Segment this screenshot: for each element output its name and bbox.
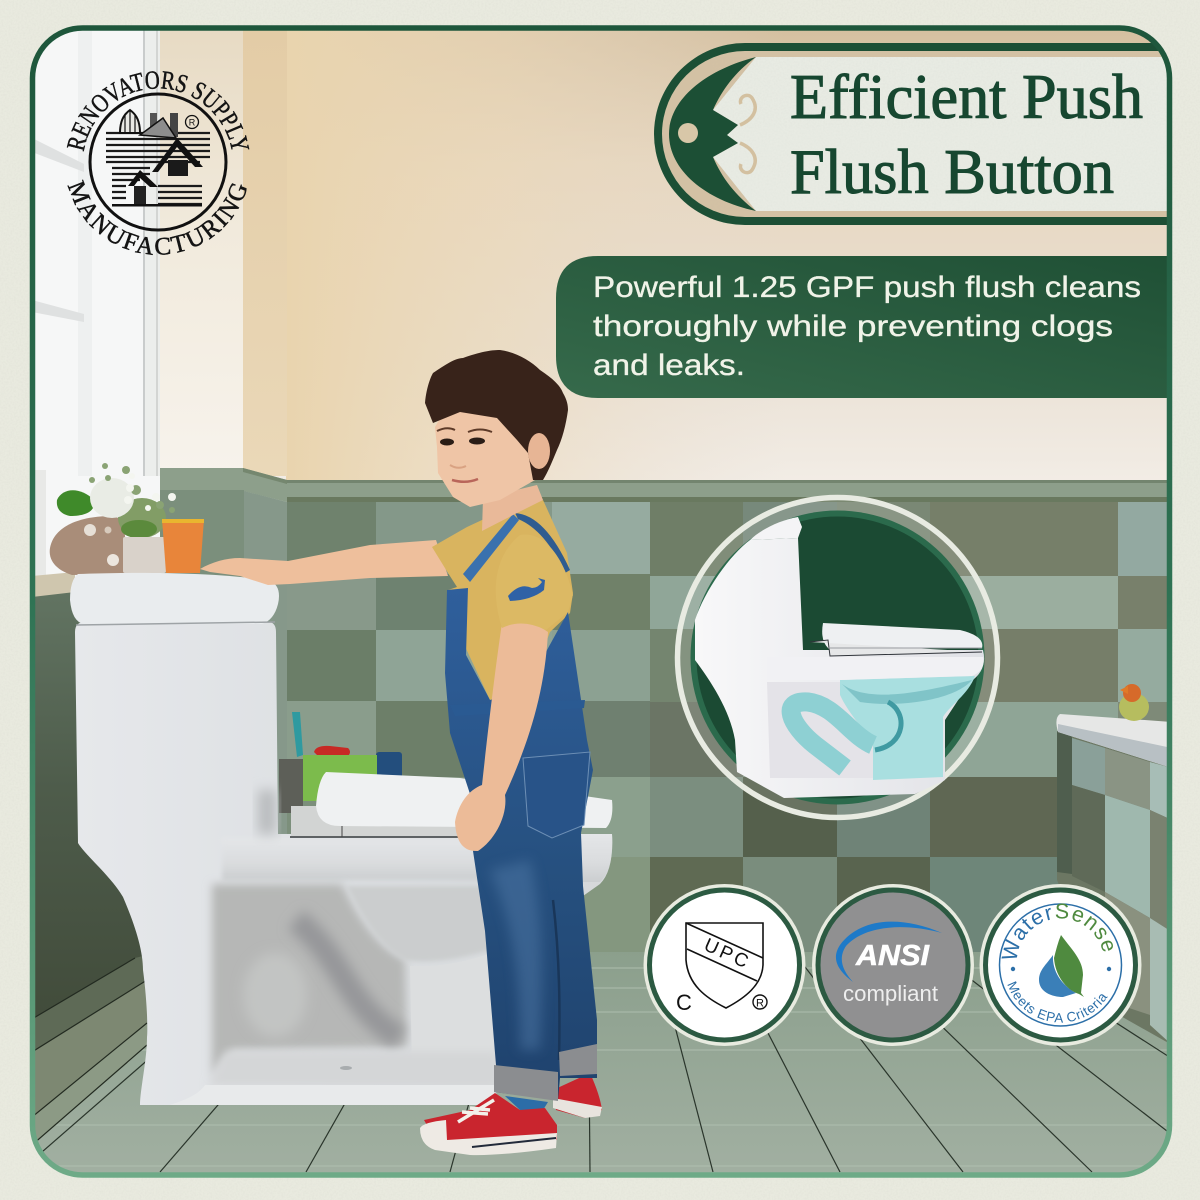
badge: UPC: R <box>756 998 764 1010</box>
straps <box>463 514 519 582</box>
sleeve <box>496 534 573 630</box>
badge: WaterSense <box>980 884 1142 1046</box>
orange pot <box>162 519 204 573</box>
face <box>435 410 535 507</box>
cutaway toilet <box>695 517 984 798</box>
floor tiles <box>19 950 1200 1180</box>
logo upper arc text: RENOVATORS SUPPLY <box>66 71 250 152</box>
logo ring <box>90 94 226 230</box>
callout text: thoroughly while preventing clogs <box>593 310 1113 343</box>
chair rail <box>160 468 1172 502</box>
smile <box>452 479 478 482</box>
title text: Efficient Push <box>790 61 1143 132</box>
upper wall <box>160 30 1167 480</box>
shirt <box>432 500 573 700</box>
row 4 <box>287 701 376 759</box>
logo lower arc text: MANUFACTURING <box>67 180 247 256</box>
plants and pots <box>50 463 204 575</box>
flush trap stream <box>791 702 873 768</box>
left wall and baseboard <box>35 592 148 1140</box>
bowl belly <box>347 886 496 962</box>
overalls and jeans <box>445 588 597 1100</box>
tank lid <box>70 573 279 624</box>
seat lid <box>316 772 612 828</box>
row 2 <box>287 574 376 630</box>
inset rim <box>767 657 984 680</box>
toilet <box>70 573 612 1105</box>
rim <box>222 840 477 880</box>
recess shading <box>296 920 400 1038</box>
white pot <box>123 537 166 573</box>
lower arm and hand <box>455 621 548 851</box>
greenery <box>118 498 166 538</box>
under-bowl recess <box>212 884 407 1078</box>
row 6 <box>287 857 552 952</box>
badge: ANSI: compliant <box>843 981 938 1006</box>
badge: WaterSense: WaterSense <box>1002 904 1113 958</box>
tank base shadow <box>258 790 276 834</box>
logo house illustration <box>106 110 210 206</box>
callout panel <box>556 256 1168 398</box>
badge: ANSI: ANSI <box>855 940 930 972</box>
badge: WaterSense: Meets EPA Criteria <box>1008 981 1108 1023</box>
callout text: Powerful 1.25 GPF push flush cleans <box>593 271 1141 304</box>
row 3 <box>287 630 376 701</box>
items behind toilet <box>279 712 402 813</box>
wall tiles <box>160 490 1172 960</box>
flush cutaway inset <box>678 498 998 818</box>
inset seat lid <box>822 623 982 648</box>
sock <box>505 1096 548 1115</box>
crescent emblem <box>669 57 756 211</box>
title banner <box>654 43 1172 225</box>
company logo <box>66 71 250 256</box>
waist seam <box>450 700 585 716</box>
banner outer band <box>654 43 1172 225</box>
hair <box>425 350 568 480</box>
tan pot <box>50 516 126 575</box>
banner paper <box>713 57 1172 211</box>
title text: Flush Button <box>790 136 1114 207</box>
banner tan band <box>662 51 1172 217</box>
logo house illustration: R <box>189 118 196 128</box>
faded denim highlight <box>490 860 542 1050</box>
boy <box>200 350 602 1155</box>
emblem dot <box>678 123 698 143</box>
inner leg seam <box>553 900 559 1060</box>
rim right lobe <box>581 834 612 882</box>
eyes <box>440 438 454 446</box>
cyan bowl <box>840 676 975 780</box>
inset dark disc <box>690 510 984 804</box>
cuffs <box>494 1065 558 1101</box>
back pocket <box>523 752 590 838</box>
inset under-bowl shade <box>767 682 873 778</box>
outstretched arm <box>200 540 448 585</box>
front shoe <box>424 1093 557 1148</box>
white flowers <box>90 478 134 518</box>
whale logo <box>508 578 545 601</box>
badge: UPC: UPC <box>701 935 754 974</box>
inset glass ring <box>678 498 998 818</box>
window sill <box>32 572 75 597</box>
ornament scrolls <box>740 95 755 173</box>
ear <box>528 433 550 469</box>
description callout <box>556 256 1168 398</box>
green leaf <box>57 490 94 516</box>
tub rim <box>1056 714 1172 768</box>
window <box>30 26 160 586</box>
neck <box>482 485 543 531</box>
bathtub <box>1056 714 1172 1045</box>
rubber duck <box>1119 684 1149 721</box>
certification badges <box>644 884 1142 1046</box>
inset outer ring <box>678 498 998 818</box>
row 1 <box>287 502 376 561</box>
toilet body <box>75 622 612 1105</box>
badge: ANSI <box>812 884 974 1046</box>
base plinth <box>212 1053 488 1085</box>
seat hinge <box>291 806 460 836</box>
row 5 <box>287 777 465 834</box>
badge: UPC <box>644 884 806 1046</box>
badge: UPC: C <box>676 990 692 1015</box>
back shoe <box>556 1078 602 1118</box>
callout text: and leaks. <box>593 349 745 382</box>
